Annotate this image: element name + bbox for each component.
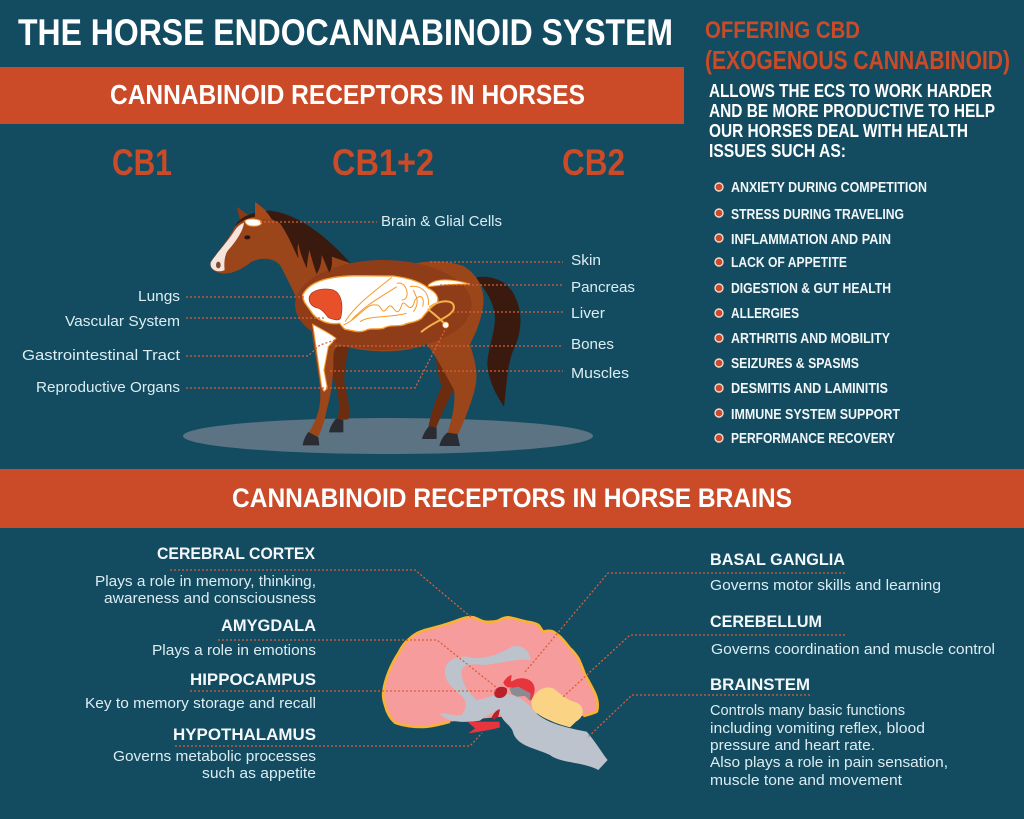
- title: THE HORSE ENDOCANNABINOID SYSTEM: [18, 12, 673, 53]
- brainstem: Controls many basic functions: [710, 702, 905, 719]
- heading: offering CBD: OFFERING CBD: [705, 17, 860, 44]
- ground shadow: [183, 418, 593, 454]
- intro text: ISSUES SUCH AS:: [709, 141, 846, 161]
- intestine coils: [343, 277, 428, 325]
- labels: CB1 organs: Lungs: [138, 288, 180, 305]
- labels: CB2 organs: [571, 252, 635, 382]
- far legs: [331, 345, 456, 428]
- hippocampus: HIPPOCAMPUS: [190, 670, 316, 689]
- liver: [309, 289, 342, 320]
- basal ganglia: [710, 550, 941, 594]
- banner: cannabinoid receptors in horse brains: [0, 469, 1024, 528]
- labels: CB2 organs: Skin: [571, 252, 601, 269]
- brainstem: including vomiting reflex, blood: [710, 720, 925, 737]
- receptor column headings: CB1+2: [332, 142, 434, 183]
- reproductive tract: [422, 301, 454, 332]
- labels: CB1 organs: Gastrointestinal Tract: [22, 347, 181, 364]
- cerebellum: Governs coordination and muscle control: [711, 641, 995, 658]
- labels: CB1 organs: [22, 288, 181, 396]
- cerebellum: CEREBELLUM: [710, 612, 822, 631]
- labels: CB2 organs: Pancreas: [571, 279, 635, 296]
- brain text: left column: [85, 544, 316, 782]
- brain text: right column: [710, 550, 995, 789]
- labels: CB1 organs: Reproductive Organs: [36, 379, 180, 396]
- intro text: [709, 81, 995, 161]
- labels: CB2 organs: Bones: [571, 336, 614, 353]
- bullet list of health issues: DIGESTION & GUT HEALTH: [731, 280, 891, 297]
- illustration: horse with organs: [210, 202, 520, 446]
- basal ganglia grey core: [509, 687, 531, 701]
- foreleg bones: [313, 324, 336, 391]
- eye: [244, 235, 250, 239]
- basal ganglia: BASAL GANGLIA: [710, 550, 845, 569]
- tail: [476, 277, 520, 407]
- intro text: OUR HORSES DEAL WITH HEALTH: [709, 121, 968, 141]
- hippocampus: [85, 670, 316, 712]
- body shading: [295, 260, 472, 350]
- label: brain and glial cells: Brain & Glial Cells: [381, 213, 502, 230]
- hypothalamus: [467, 722, 500, 733]
- cerebral cortex: awareness and consciousness: [104, 590, 316, 607]
- hypothalamus: HYPOTHALAMUS: [173, 725, 316, 744]
- ventricle and brainstem: [440, 646, 608, 770]
- leader lines: horse: [186, 222, 563, 388]
- basal ganglia: [503, 675, 535, 701]
- brainstem: Also plays a role in pain sensation,: [710, 754, 948, 771]
- bullet list of health issues: STRESS DURING TRAVELING: [731, 206, 904, 223]
- basal ganglia: Governs motor skills and learning: [710, 577, 941, 594]
- banner: cannabinoid receptors in horses: CANNABINOID RECEPTORS IN HORSES: [110, 79, 585, 110]
- hippocampus and amygdala: [494, 687, 507, 698]
- receptor column headings: CB1: [112, 142, 172, 183]
- bullet list of health issues: SEIZURES & SPASMS: [731, 355, 859, 372]
- cortex fill: [383, 617, 598, 727]
- cerebral cortex: Plays a role in memory, thinking,: [95, 573, 316, 590]
- bullet list of health issues: LACK OF APPETITE: [731, 254, 847, 271]
- blaze and muzzle: [211, 223, 244, 271]
- bullet list of health issues: PERFORMANCE RECOVERY: [731, 430, 895, 447]
- hypothalamus: such as appetite: [202, 765, 316, 782]
- cerebellum: [531, 687, 583, 727]
- cortex outline: [383, 617, 598, 727]
- bullet list of health issues: DESMITIS AND LAMINITIS: [731, 380, 888, 397]
- brainstem: BRAINSTEM: [710, 675, 810, 694]
- bullet list of health issues: IMMUNE SYSTEM SUPPORT: [731, 406, 900, 423]
- back ear: [237, 207, 250, 220]
- hypothalamus: [113, 725, 316, 782]
- front ear: [255, 202, 272, 219]
- bullet list of health issues: ARTHRITIS AND MOBILITY: [731, 330, 890, 347]
- banner: cannabinoid receptors in horse brains: CANNABINOID RECEPTORS IN HORSE BRAINS: [232, 483, 792, 513]
- thorax and gut silhouette: [303, 276, 438, 332]
- cerebellum: [710, 612, 995, 658]
- leader lines: brain: [170, 570, 845, 746]
- brainstem: muscle tone and movement: [710, 772, 903, 789]
- pituitary stalk: [492, 709, 500, 720]
- hooves: [303, 419, 460, 446]
- panel: CBD benefits: [705, 17, 1010, 447]
- brain highlight: [245, 219, 262, 226]
- labels: CB2 organs: Muscles: [571, 365, 629, 382]
- receptor column headings: [112, 142, 625, 183]
- bullet list of health issues: INFLAMMATION AND PAIN: [731, 231, 891, 248]
- amygdala: AMYGDALA: [221, 616, 316, 635]
- amygdala: Plays a role in emotions: [152, 642, 316, 659]
- bullet list of health issues: ALLERGIES: [731, 305, 799, 322]
- banner: cannabinoid receptors in horses: [0, 67, 684, 124]
- labels: CB1 organs: Vascular System: [65, 313, 180, 330]
- bullet list of health issues: [715, 179, 927, 447]
- brainstem: pressure and heart rate.: [710, 737, 875, 754]
- amygdala: [152, 616, 316, 659]
- body: [210, 202, 484, 438]
- hypothalamus: Governs metabolic processes: [113, 748, 316, 765]
- cerebral cortex: [95, 544, 316, 607]
- labels: CB2 organs: Liver: [571, 305, 605, 322]
- receptor column headings: CB2: [562, 142, 625, 183]
- mane: [235, 211, 351, 274]
- hippocampus: Key to memory storage and recall: [85, 695, 316, 712]
- bullet list of health issues: ANXIETY DURING COMPETITION: [731, 179, 927, 196]
- colon and spine: [428, 280, 470, 287]
- cerebral cortex: CEREBRAL CORTEX: [157, 544, 316, 563]
- illustration: brain: [383, 617, 608, 770]
- brainstem: [710, 675, 948, 789]
